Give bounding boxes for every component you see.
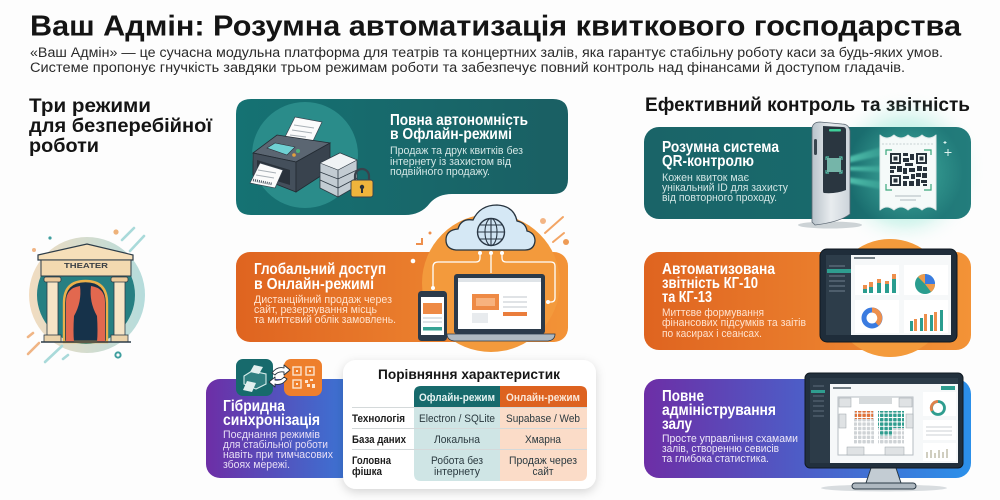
icon: theater bbox=[28, 228, 145, 362]
text: online: сайт, резеряування місць bbox=[254, 304, 377, 316]
text: online bbox=[254, 294, 396, 326]
row: technology: Supabase / Web bbox=[506, 413, 580, 425]
text: online: та миттєвий облік замовлень. bbox=[254, 314, 396, 326]
text: QR: Кожен квиток має bbox=[662, 172, 749, 184]
row: technology: Технологія bbox=[352, 413, 405, 425]
text: QR: унікальний ID для захисту bbox=[662, 182, 788, 194]
heading: reports: звітність КГ-10 bbox=[662, 275, 758, 292]
text: reports: Миттєве формування bbox=[662, 307, 764, 319]
heading: control and reporting: Ефективний контроль та звітність bbox=[645, 94, 970, 116]
icon: phone bbox=[418, 291, 447, 341]
heading: QR: QR-контролю bbox=[662, 153, 754, 170]
text: hybrid: для стабільної роботи bbox=[223, 439, 328, 451]
text: offline bbox=[390, 145, 523, 178]
row: technology bbox=[352, 413, 580, 425]
row: key feature: сайт bbox=[532, 466, 554, 478]
intro text bbox=[30, 45, 943, 75]
panel: online mode bbox=[236, 205, 569, 352]
text: QR bbox=[662, 172, 788, 204]
heading: hall: адміністрування bbox=[662, 402, 776, 419]
heading: reports bbox=[662, 261, 775, 306]
heading: three modes bbox=[29, 95, 213, 157]
row: key feature: інтернету bbox=[434, 466, 480, 478]
icon: cloud with globe bbox=[416, 205, 569, 250]
text: reports bbox=[662, 307, 806, 340]
icon: QR ticket bbox=[880, 135, 952, 210]
column: online bbox=[500, 386, 587, 481]
text: hall: Просте управління схамами bbox=[662, 433, 798, 445]
text: offline: Продаж та друк квитків без bbox=[390, 145, 523, 157]
row: database: База даних bbox=[352, 434, 407, 446]
icon: connectors bbox=[411, 251, 555, 304]
text: reports: фінансових підсумків та заітів bbox=[662, 317, 806, 329]
heading: online: Глобальний доступ bbox=[254, 261, 386, 278]
text: hall: залів, створенню севисів bbox=[662, 443, 779, 455]
row: database bbox=[352, 434, 562, 446]
heading: offline: в Офлайн-режимі bbox=[390, 126, 512, 143]
row: key feature bbox=[352, 455, 577, 478]
intro text: Системе пропонує гнучкість завдяки трьом режимам роботи та забезпечує повний контроль над фінансами й доступом гладачів. bbox=[30, 60, 905, 75]
panel: automated reports bbox=[644, 239, 971, 357]
icon: dashboard tablet bbox=[820, 249, 957, 342]
title: Ваш Адмін: Розумна автоматизація квиткового господарства bbox=[30, 10, 962, 42]
text: hall: та глибока статистика. bbox=[662, 453, 769, 465]
icon: printer and locked server bbox=[250, 102, 373, 208]
icon: theater: THEATER bbox=[64, 261, 109, 270]
row: database: Локальна bbox=[434, 434, 481, 446]
panel: hall administration bbox=[644, 373, 971, 492]
panel: offline mode bbox=[236, 99, 568, 215]
heading: online bbox=[254, 261, 386, 293]
column: online: Онлайн-режим bbox=[506, 392, 580, 404]
row: technology: Electron / SQLite bbox=[419, 413, 495, 425]
text: offline: інтернету із захистом від bbox=[390, 156, 512, 168]
text: offline: подвійного продажу. bbox=[390, 166, 490, 178]
text: hybrid bbox=[223, 429, 333, 471]
panel: comparison table bbox=[343, 360, 596, 489]
text: online: Дистанційний продаж через bbox=[254, 294, 392, 306]
heading: three modes: Три режими bbox=[29, 95, 151, 117]
text: QR: від повторного проходу. bbox=[662, 192, 777, 204]
icon: scanner kiosk bbox=[798, 122, 862, 228]
column: offline bbox=[414, 386, 500, 481]
row: key feature: Робота без bbox=[431, 455, 483, 467]
icon: printer tile bbox=[236, 359, 273, 396]
column: offline: Офлайн-режим bbox=[419, 392, 495, 404]
heading: reports: та КГ-13 bbox=[662, 289, 712, 306]
table title: Порівняння характеристик bbox=[378, 366, 561, 382]
row: key feature: фішка bbox=[352, 466, 383, 478]
heading: hall bbox=[662, 388, 776, 433]
text: reports: по касирах і сеансах. bbox=[662, 328, 762, 340]
heading: offline bbox=[390, 112, 528, 143]
heading: hybrid: синхронізація bbox=[223, 412, 320, 429]
heading: offline: Повна автономність bbox=[390, 112, 528, 129]
icon: scan beams bbox=[838, 146, 885, 190]
heading: hall: Повне bbox=[662, 388, 704, 405]
heading: QR: Розумна система bbox=[662, 139, 779, 156]
icon: laptop bbox=[447, 274, 555, 341]
row: database: Хмарна bbox=[525, 434, 562, 446]
icon: sync arrows bbox=[269, 365, 290, 387]
panel: QR control bbox=[644, 108, 971, 232]
icon: monitor with seat map bbox=[805, 373, 963, 492]
heading: hybrid: Гібридна bbox=[223, 398, 285, 415]
heading: online: в Онлайн-режимі bbox=[254, 276, 374, 293]
heading: hall: залу bbox=[662, 416, 692, 433]
heading: QR bbox=[662, 139, 779, 170]
row: key feature: Головна bbox=[352, 455, 392, 467]
text: hall bbox=[662, 433, 798, 465]
panel: hybrid sync bbox=[206, 359, 356, 478]
text: hybrid: навіть при тимчасових bbox=[223, 449, 333, 461]
intro text: «Ваш Адмін» — це сучасна модульна платформа для театрів та концертних залів, яка гарантує стабільну роботу каси за будь-яких умов. bbox=[30, 45, 943, 60]
heading: reports: Автоматизована bbox=[662, 261, 775, 278]
icon: QR tile bbox=[284, 359, 322, 396]
heading: hybrid bbox=[223, 398, 320, 429]
heading: three modes: роботи bbox=[29, 135, 99, 157]
row: key feature: Продаж через bbox=[509, 455, 577, 467]
text: hybrid: Поєднання режимів bbox=[223, 429, 320, 441]
text: hybrid: збоях мережі. bbox=[223, 459, 290, 471]
heading: three modes: для безперебійної bbox=[29, 115, 213, 137]
